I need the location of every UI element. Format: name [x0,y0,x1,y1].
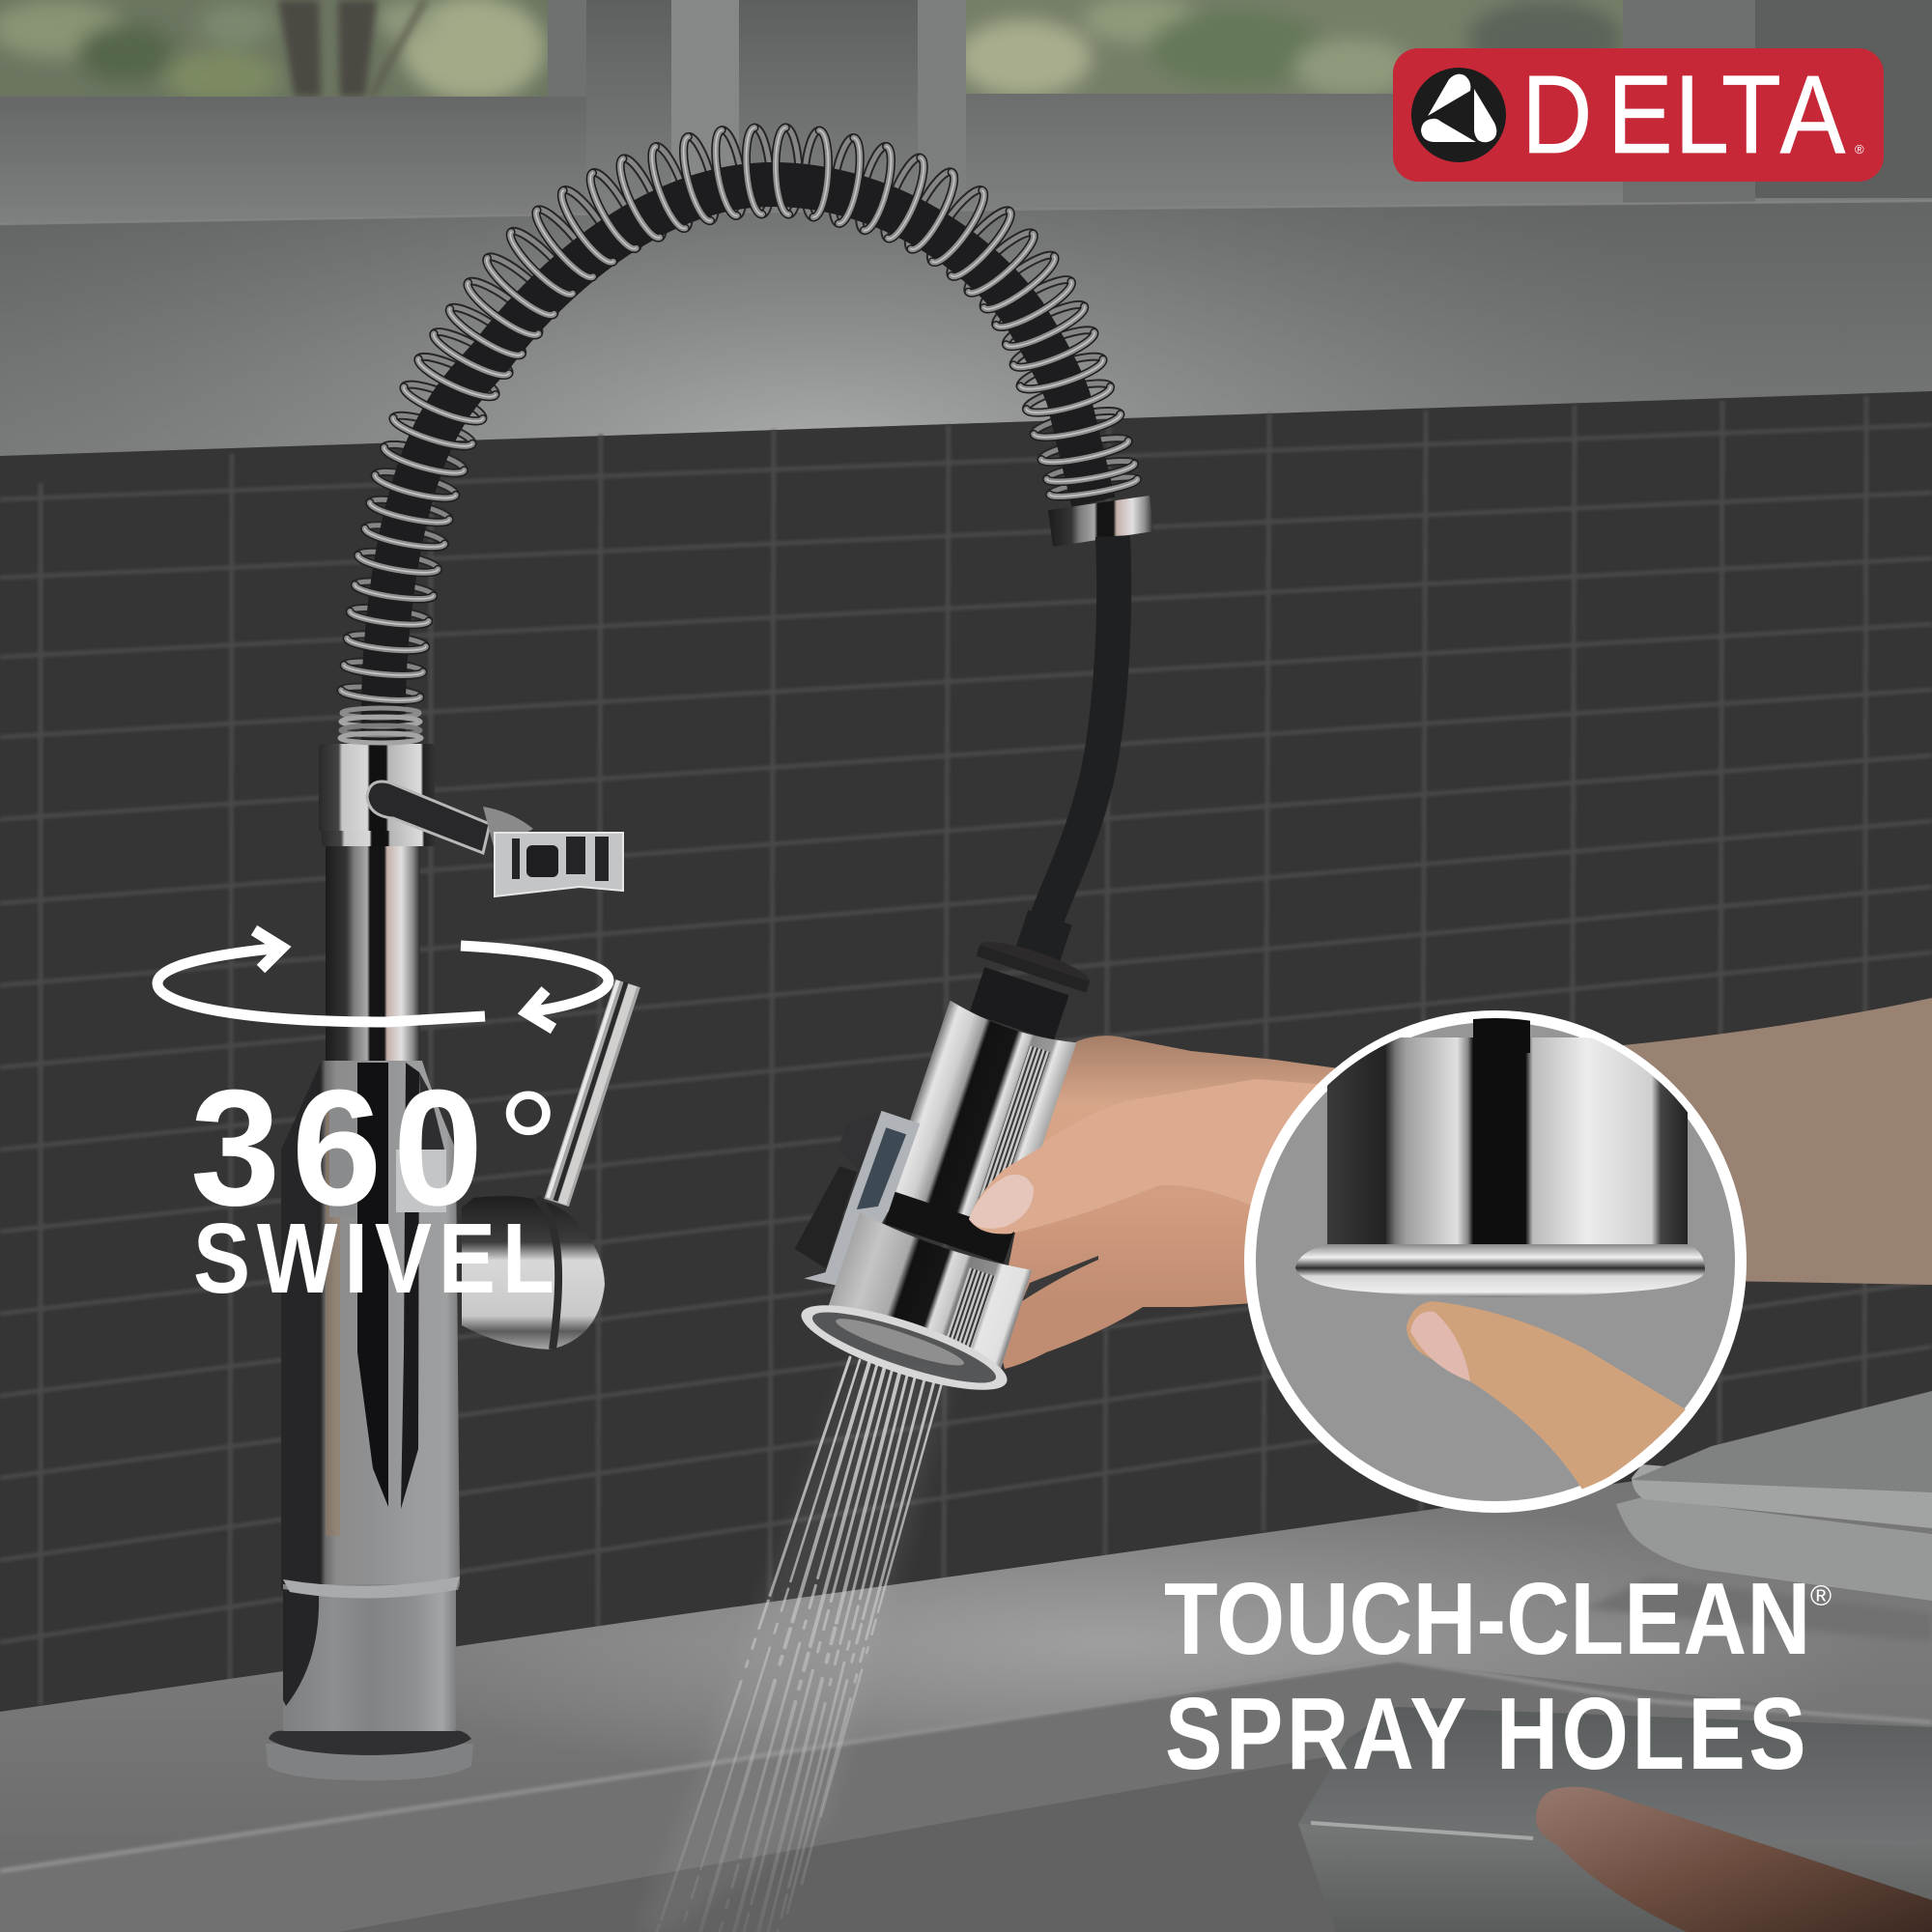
Delta triangle emblem [1411,68,1506,162]
spout end collar [1048,496,1153,547]
stacked plates [1584,1391,1932,1642]
countertop and sink [0,1439,1932,1932]
forearm behind inset [1623,998,1932,1285]
base dark reflection [283,1589,319,1706]
sink bowl [1298,1707,1932,1845]
touch-clean spray holes label: ® [1810,1580,1832,1612]
under-cabinet trim band [0,201,1932,456]
spray face [793,1289,1015,1406]
spout clip arm [367,781,623,896]
touch-clean spray holes label [1164,1562,1832,1791]
base lower section [283,1584,456,1739]
hand in sink foreground [1536,1787,1932,1932]
inset fingernail [1410,1312,1470,1381]
360 degree rotation arrows [157,930,609,1029]
window frame panels [0,0,1932,224]
window with foliage, left [0,0,548,104]
lower ring [823,1183,1043,1379]
thumb nail [969,1175,1034,1229]
spring coil front half [341,127,1138,703]
index finger [969,1079,1352,1234]
faucet base body [281,1061,460,1590]
360° swivel label: 360 [190,1055,495,1239]
tile backsplash [0,391,1932,1712]
upper body [878,1001,1076,1257]
faucet lever handle [462,980,633,1350]
top collar [319,744,436,846]
side bracket [804,1104,920,1297]
window with foliage, right [956,0,1623,97]
hand holding spray head [969,1036,1352,1369]
body moire highlight [967,1045,1050,1239]
faucet column and base [266,744,623,1780]
black neck and flange [958,899,1105,1046]
360° swivel label: SWIVEL [193,1204,561,1315]
pull-down hose [1047,536,1114,918]
water spray [638,1357,952,1932]
touch-clean spray holes label: TOUCH-CLEAN [1164,1562,1811,1676]
trigger and buttons [792,1099,879,1268]
close-wound coil base [340,708,421,743]
gap between fingers [1022,1256,1098,1301]
reflections on faucet base [326,1063,446,1536]
narrow column [326,840,420,1065]
hose inside the coil [384,185,1094,744]
spring coil back half [341,127,1138,703]
base foot ring [266,1731,473,1780]
Delta logo badge [1393,48,1884,182]
inset chrome cylinder [1327,1037,1688,1256]
touch-clean spray holes label: SPRAY HOLES [1165,1676,1809,1791]
Delta logo badge: DELTA [1521,52,1846,176]
Delta logo badge: ® [1855,142,1864,156]
360° swivel label [190,1055,561,1315]
inset flange [1295,1244,1705,1297]
thumb tip over spray head [969,1140,1072,1234]
spray head [768,874,1151,1406]
palm and back of hand [995,1036,1352,1369]
360° swivel label: ° [497,1059,560,1236]
base collar ring [283,1577,460,1599]
inset finger [1406,1301,1686,1492]
inset circle: touch-clean detail [1250,1014,1741,1507]
